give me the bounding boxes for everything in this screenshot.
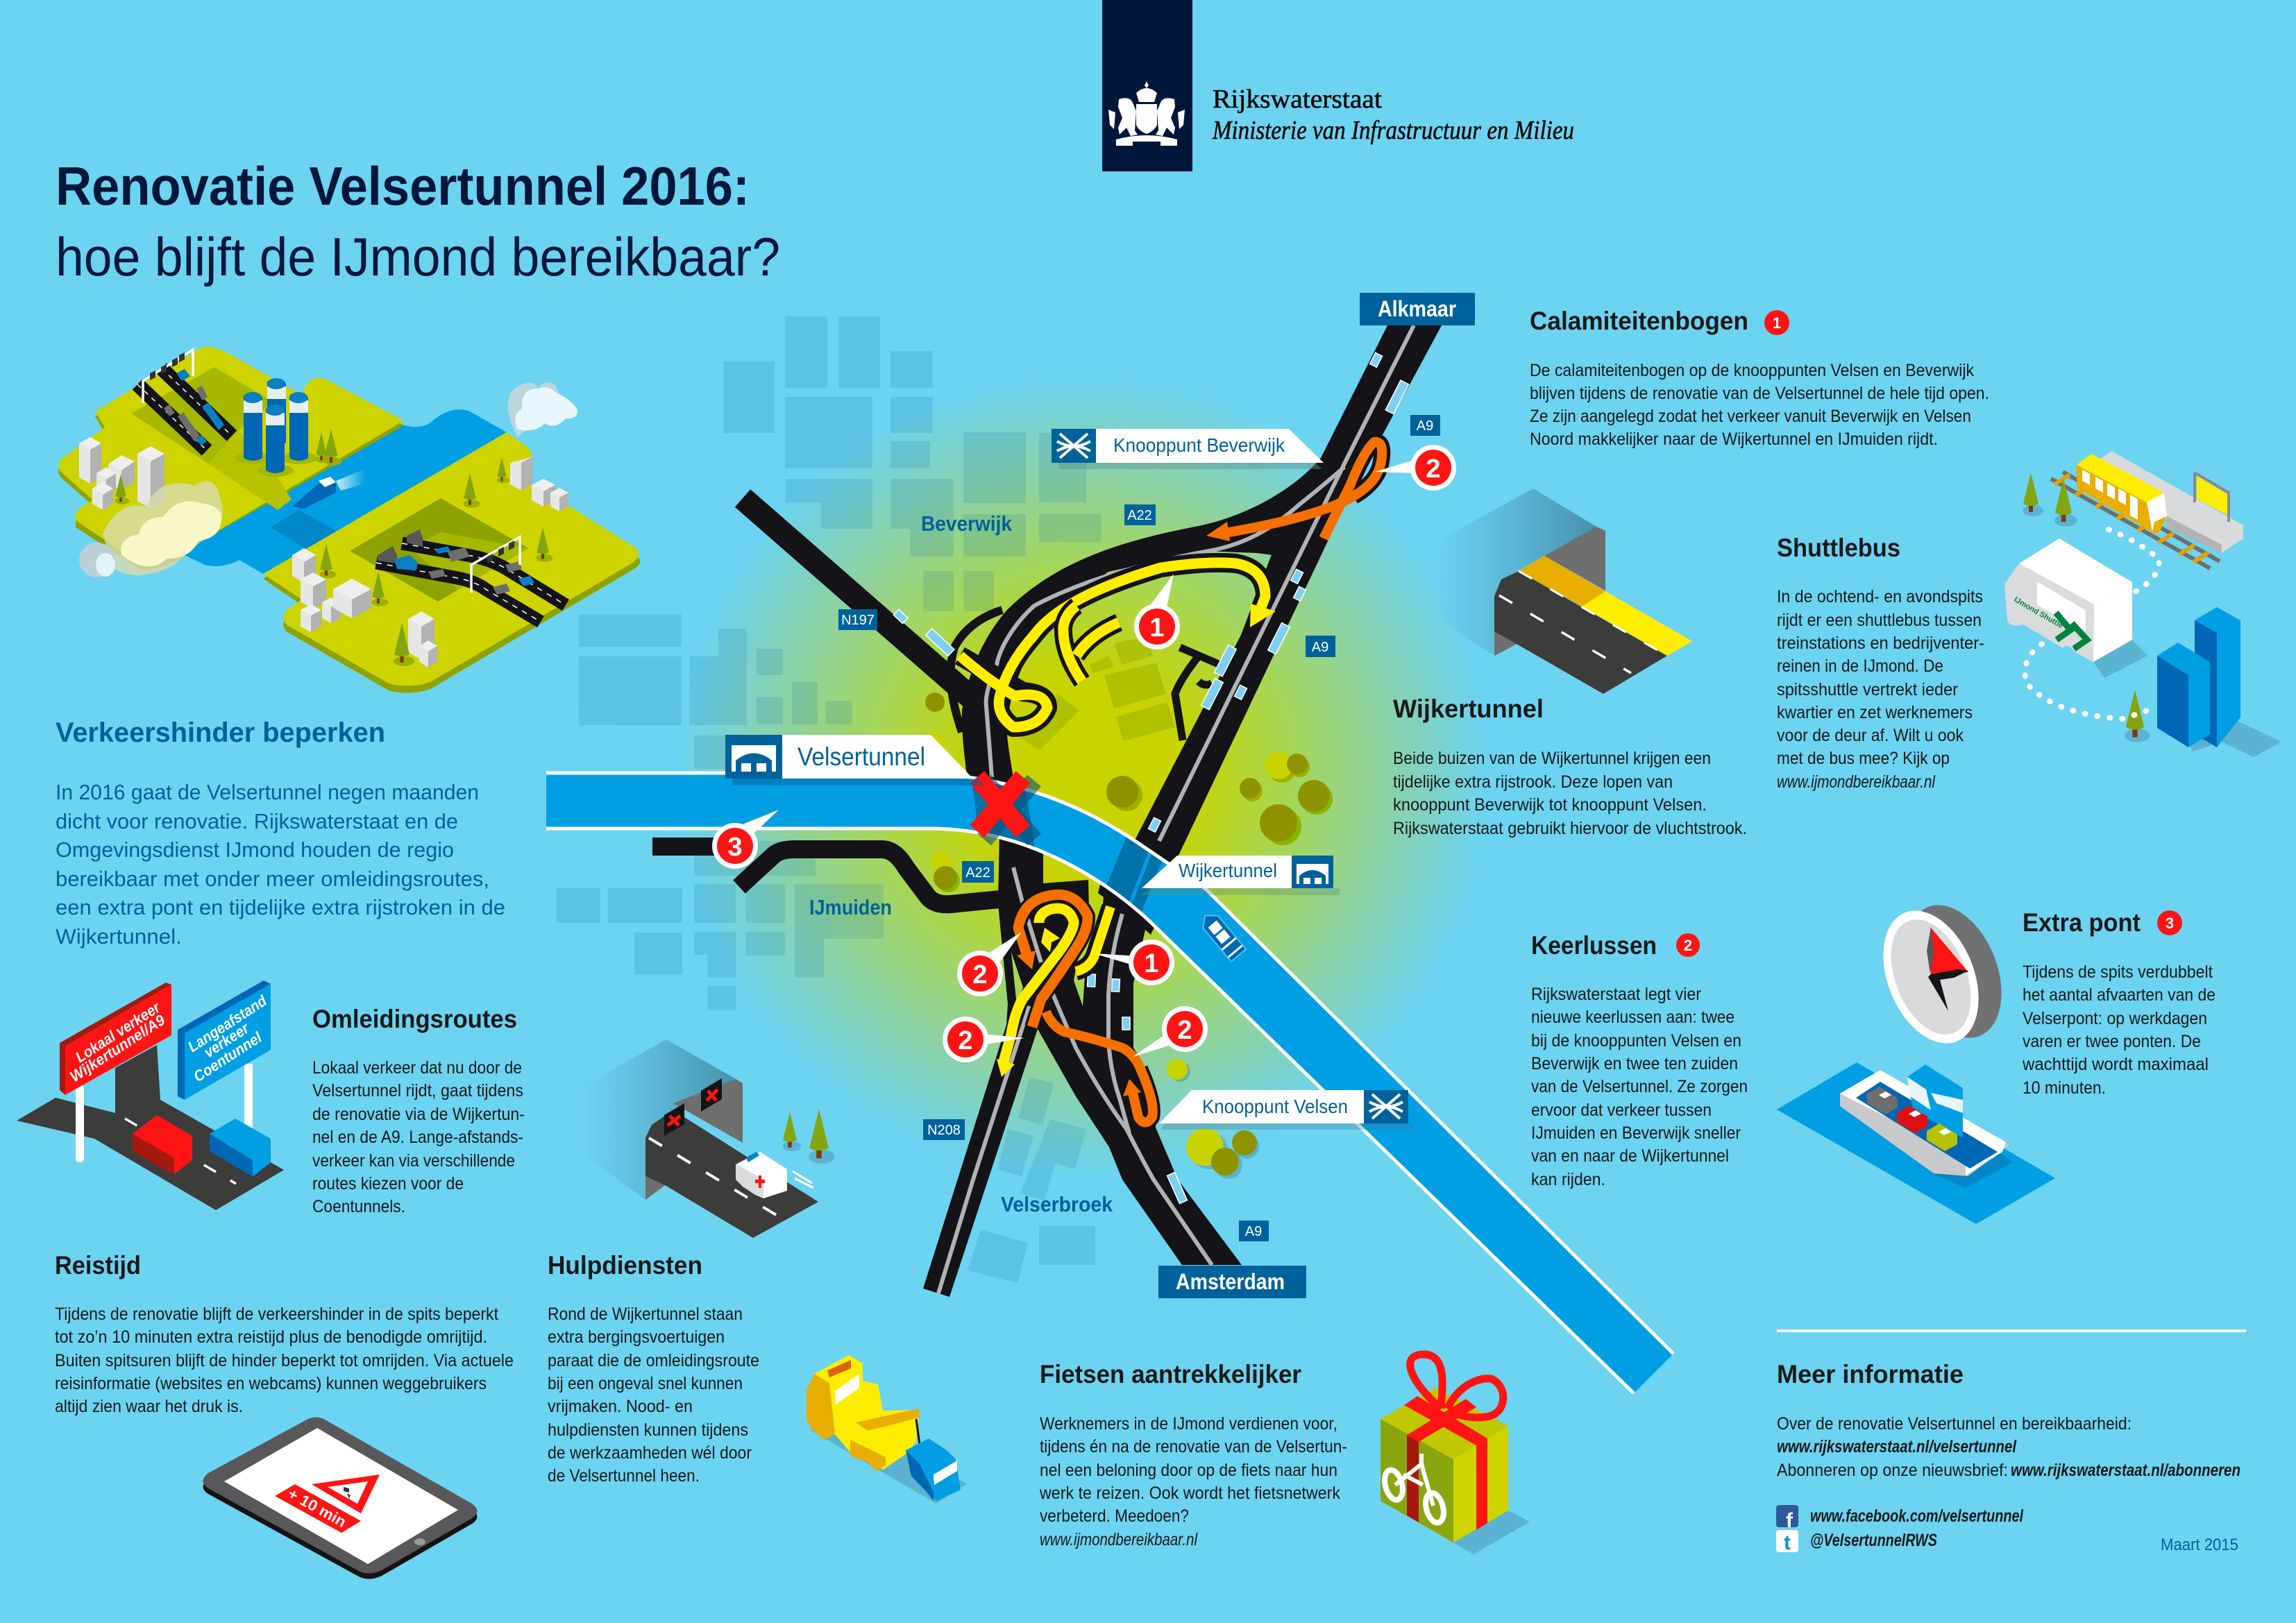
panel: Fietsen aantrekkelijker: verbeterd. Meedoen? — [1040, 1506, 1189, 1526]
panel: Meer informatie: www.rijkswaterstaat.nl/abonneren — [2011, 1461, 2240, 1480]
panel: Hulpdiensten: bij een ongeval snel kunnen — [548, 1374, 743, 1393]
tunnel portals — [378, 529, 423, 563]
illustration: isometric island with tunnels — [58, 347, 640, 693]
date: Maart 2015 — [2161, 1536, 2238, 1554]
label: Velsertunnel: Velsertunnel — [797, 742, 925, 771]
label: Velsertunnel — [725, 735, 984, 785]
panel: Hulpdiensten — [548, 1251, 759, 1486]
panel: Omleidingsroutes: Omleidingsroutes — [312, 1005, 517, 1033]
panel: Fietsen aantrekkelijker: nel een beloning door op de fiets naar hun — [1040, 1461, 1337, 1480]
label: Amsterdam — [1158, 1266, 1306, 1298]
red truck — [133, 1115, 192, 1174]
panel: Fietsen aantrekkelijker: Werknemers in de IJmond verdienen voor, — [1040, 1414, 1337, 1434]
panel: Shuttlebus: spitsshuttle vertrekt ieder — [1777, 680, 1958, 699]
panel: Shuttlebus: In de ochtend- en avondspits — [1777, 587, 1983, 606]
panel: Meer informatie: Abonneren op onze nieuwsbrief: — [1777, 1461, 2008, 1480]
panel: Hulpdiensten: hulpdiensten kunnen tijdens — [548, 1420, 748, 1440]
road: small ramp at A9 — [1175, 647, 1220, 740]
river section — [180, 409, 507, 574]
panel: Calamiteitenbogen: blijven tijdens de renovatie van de Velsertunnel de hele tijd open. — [1530, 384, 1989, 403]
panel: Meer informatie: www.rijkswaterstaat.nl/velsertunnel — [1777, 1437, 2017, 1456]
road: green gap in interchange — [1011, 952, 1023, 1006]
place names: Velserbroek — [1001, 1192, 1113, 1216]
panel: Fietsen aantrekkelijker: www.ijmondbereikbaar.nl — [1040, 1530, 1198, 1549]
road tag labels: A9 — [1312, 640, 1328, 655]
ship on map — [1198, 909, 1246, 962]
illustration: tow truck and car — [807, 1355, 967, 1504]
warning signals — [664, 1078, 722, 1136]
icon: twitter — [1776, 1530, 1798, 1554]
panel: Fietsen aantrekkelijker: Fietsen aantrekkelijker — [1040, 1360, 1301, 1388]
red sign: Wijkertunnel/A9 — [67, 1011, 169, 1085]
panel: Reistijd: Reistijd — [55, 1251, 141, 1280]
ambulance — [736, 1152, 813, 1198]
callout: 3 pont: 3 — [727, 833, 743, 862]
panel: Keerlussen: IJmuiden en Beverwijk sneller — [1531, 1123, 1741, 1143]
intro paragraph — [56, 780, 505, 949]
panel: Shuttlebus: kwartier en zet werknemers — [1777, 703, 1973, 722]
panel: Keerlussen: Keerlussen — [1531, 931, 1657, 960]
road: south interchange, A9 and N208 — [923, 833, 1242, 1297]
intro paragraph: Wijkertunnel. — [56, 924, 182, 949]
road: N197 — [743, 498, 979, 704]
marker: red cross Velsertunnel — [977, 777, 1034, 840]
panel: Omleidingsroutes: routes kiezen voor de — [312, 1174, 464, 1193]
panel: Extra pont: het aantal afvaarten van de — [2023, 985, 2215, 1005]
label: Alkmaar: Alkmaar — [1378, 296, 1456, 321]
blue truck — [210, 1119, 271, 1177]
shuttle bus: IJmond Shuttle — [2013, 595, 2064, 630]
illustration: tunnel with ambulance — [584, 1039, 834, 1238]
callout: 1 north — [1134, 574, 1180, 649]
panel: Calamiteitenbogen — [1530, 307, 1989, 449]
route 2: keerlus zuid geel — [997, 908, 1074, 1077]
badge 3: 3 — [2166, 915, 2174, 932]
subtitle: hoe blijft de IJmond bereikbaar? — [56, 226, 780, 287]
callout: 1 north: 1 — [1149, 613, 1165, 643]
cloud large — [79, 481, 223, 577]
intro paragraph: Omgevingsdienst IJmond houden de regio — [56, 838, 454, 862]
panel: Omleidingsroutes: Velsertunnel rijdt, gaat tijdens — [312, 1081, 523, 1101]
panel: Wijkertunnel: knooppunt Beverwijk tot knooppunt Velsen. — [1393, 795, 1707, 815]
shuttle bus — [2004, 538, 2147, 678]
blue sign: Langeafstand — [185, 992, 270, 1055]
panel: Wijkertunnel: Rijkswaterstaat gebruikt hiervoor de vluchtstrook. — [1393, 819, 1747, 838]
label: Alkmaar — [1360, 293, 1475, 325]
illustration: shuttlebus with train and offices — [2004, 451, 2281, 757]
callout: 2 zuid west: 2 — [972, 960, 988, 989]
place names: IJmuiden — [809, 895, 892, 919]
panel: Hulpdiensten: de Velsertunnel heen. — [548, 1466, 700, 1486]
crest — [1108, 81, 1185, 146]
panel: Meer informatie: Over de renovatie Velsertunnel en bereikbaarheid: — [1777, 1414, 2132, 1434]
left island — [58, 347, 404, 570]
panel: Omleidingsroutes: nel en de A9. Lange-afstands- — [312, 1128, 523, 1147]
callout: 2 zuid geel — [943, 1017, 1024, 1062]
panel: Extra pont: wachttijd wordt maximaal — [2022, 1055, 2209, 1074]
panel: Reistijd: reisinformatie (websites en webcams) kunnen weggebruikers — [55, 1374, 487, 1393]
panel: Omleidingsroutes: verkeer kan via verschillende — [312, 1151, 515, 1171]
badge 2: 2 — [1684, 937, 1692, 954]
gantries — [143, 350, 520, 593]
panel: Extra pont: 10 minuten. — [2023, 1078, 2106, 1098]
route 2: keerlus Beverwijk — [1206, 442, 1382, 541]
label: Wijkertunnel: Wijkertunnel — [1179, 860, 1277, 881]
label: Amsterdam: Amsterdam — [1176, 1269, 1285, 1294]
red sign: Lokaal verkeer — [72, 998, 164, 1066]
trees — [115, 429, 552, 666]
panel: Shuttlebus: treinstations en bedrijventer- — [1777, 634, 1984, 653]
trees — [2023, 473, 2150, 742]
right island — [263, 438, 640, 693]
cloud small — [508, 382, 577, 437]
label: Knooppunt Beverwijk — [1052, 429, 1324, 469]
trees on map — [920, 692, 1333, 1179]
text: Verkeershinder beperken: Verkeershinder beperken — [56, 717, 385, 748]
panel: Shuttlebus: rijdt er een shuttlebus tussen — [1777, 611, 1982, 630]
panel: Meer informatie — [1776, 1329, 2246, 1554]
billboard — [2195, 473, 2229, 522]
panel: Hulpdiensten: de werkzaamheden wél door — [548, 1443, 752, 1463]
illustration: tablet: + 10 min — [285, 1485, 349, 1531]
panel: Hulpdiensten: paraat die de omleidingsroute — [548, 1351, 759, 1370]
panel: Keerlussen — [1531, 931, 1748, 1189]
panel: Hulpdiensten: Rond de Wijkertunnel staan — [548, 1305, 743, 1324]
icon: twitter: t — [1784, 1531, 1791, 1554]
panel: Keerlussen: van de Velsertunnel. Ze zorgen — [1531, 1077, 1748, 1096]
icon: facebook: f — [1786, 1509, 1793, 1532]
panel: Extra pont: Velserpont: op werkdagen — [2023, 1009, 2207, 1028]
intro paragraph: In 2016 gaat de Velsertunnel negen maanden — [56, 780, 479, 804]
route 1: zuid — [1076, 907, 1111, 971]
panel: Omleidingsroutes: Lokaal verkeer dat nu door de — [312, 1058, 522, 1078]
panel: Reistijd — [55, 1251, 514, 1416]
logo ministry line: Ministerie van Infrastructuur en Milieu — [1212, 116, 1574, 145]
callout: 2 Beverwijk: 2 — [1426, 454, 1441, 484]
panel: Reistijd: Buiten spitsuren blijft de hinder beperkt tot omrijden. Via actuele — [55, 1351, 514, 1370]
panel: Reistijd: altijd zien waar het druk is. — [55, 1397, 243, 1416]
sunken road areas — [131, 367, 273, 464]
panel: Reistijd: tot zo’n 10 minuten extra reistijd plus de benodigde omrijtijd. — [55, 1327, 487, 1347]
panel: Wijkertunnel: tijdelijke extra rijstrook. Deze lopen van — [1393, 772, 1673, 792]
panel: Extra pont: Tijdens de spits verdubbelt — [2023, 962, 2213, 982]
towers — [235, 452, 271, 464]
road tag labels — [841, 418, 1433, 1239]
roads — [652, 325, 1442, 1297]
panel: Keerlussen: nieuwe keerlussen aan: twee — [1531, 1008, 1734, 1027]
panel: Keerlussen: bij de knooppunten Velsen en — [1531, 1031, 1741, 1051]
intro paragraph: bereikbaar met onder meer omleidingsroutes, — [56, 867, 489, 891]
panel: Wijkertunnel: Beide buizen van de Wijkertunnel krijgen een — [1393, 749, 1711, 768]
intro paragraph: dicht voor renovatie. Rijkswaterstaat en de — [56, 809, 458, 833]
panel: Calamiteitenbogen: Calamiteitenbogen — [1530, 307, 1748, 335]
route dots — [2025, 529, 2159, 719]
panel: Shuttlebus: met de bus mee? Kijk op — [1777, 749, 1950, 768]
panel: Keerlussen: kan rijden. — [1531, 1170, 1605, 1189]
panel: Keerlussen: ervoor dat verkeer tussen — [1531, 1101, 1712, 1120]
route 2: keerlus zuid oranje — [1017, 894, 1088, 1027]
callout: 2 zuid geel: 2 — [958, 1026, 973, 1055]
title: Renovatie Velsertunnel 2016: — [56, 155, 750, 216]
text: Verkeershinder beperken — [56, 717, 505, 949]
blue sign — [178, 980, 271, 1100]
callout: 1 zuid — [1094, 940, 1174, 985]
road tag labels: A9 — [1417, 418, 1433, 434]
road tag labels: A22 — [965, 865, 990, 881]
illustration: clock — [1865, 891, 2020, 1057]
illustration: gift — [1381, 1354, 1530, 1554]
road tag labels: N197 — [841, 613, 875, 628]
poles — [76, 1064, 253, 1162]
label: Knooppunt Velsen — [1159, 1090, 1414, 1130]
panel: Omleidingsroutes — [312, 1005, 525, 1216]
road: A22 north — [962, 458, 1336, 788]
offices — [2157, 607, 2281, 757]
road — [17, 1045, 284, 1210]
place names — [809, 511, 1113, 1216]
glow — [677, 375, 1489, 1180]
intro paragraph: een extra pont en tijdelijke extra rijstroken in de — [56, 895, 505, 919]
tracks — [2051, 472, 2220, 568]
routes — [960, 442, 1382, 1123]
badge 1: 1 — [1773, 314, 1781, 332]
road tag labels: A22 — [1127, 508, 1152, 523]
panel: Calamiteitenbogen: De calamiteitenbogen op de knooppunten Velsen en Beverwijk — [1530, 361, 1974, 380]
road tag labels: N208 — [927, 1123, 961, 1138]
title — [56, 155, 780, 287]
blue sign: Coentunnel — [190, 1028, 265, 1085]
place names: Beverwijk — [921, 511, 1013, 536]
panel: Fietsen aantrekkelijker — [1039, 1360, 1347, 1549]
illustration: tablet — [203, 1417, 478, 1579]
badge 3 — [2157, 910, 2182, 935]
badge 2 — [1676, 933, 1700, 957]
illustration: Wijkertunnel — [1435, 488, 1692, 694]
road: thin loop west — [951, 610, 1002, 732]
panel: Shuttlebus: reinen in de IJmond. De — [1777, 656, 1943, 676]
callout: 3 pont — [712, 810, 779, 869]
road tag labels: A9 — [1245, 1224, 1262, 1239]
panel: Omleidingsroutes: de renovatie via de Wijkertun- — [312, 1105, 525, 1124]
route 2: keerlus lower — [1046, 1012, 1153, 1123]
panel: Wijkertunnel: Wijkertunnel — [1393, 695, 1544, 723]
river — [546, 763, 1673, 1393]
label: Knooppunt Beverwijk: Knooppunt Beverwijk — [1113, 434, 1285, 456]
road: A9 north — [1128, 325, 1442, 874]
panel: Hulpdiensten: extra bergingsvoertuigen — [548, 1327, 725, 1347]
panel: Fietsen aantrekkelijker: werk te reizen. Ook wordt het fietsnetwerk — [1039, 1484, 1340, 1503]
route 1: calamiteitenboog noord — [960, 563, 1276, 727]
vehicles — [164, 386, 522, 595]
callout: 2 Beverwijk — [1375, 445, 1456, 491]
callout: 2 zuid west — [957, 932, 1022, 996]
city blocks — [557, 316, 1101, 1283]
roads — [137, 368, 232, 450]
label: Wijkertunnel — [1142, 856, 1340, 895]
panel: Shuttlebus — [1777, 534, 1984, 792]
panel: Fietsen aantrekkelijker: tijdens én na de renovatie van de Velsertun- — [1040, 1437, 1347, 1456]
panel: Omleidingsroutes: Coentunnels. — [312, 1197, 405, 1216]
map — [546, 293, 1673, 1393]
train — [2076, 454, 2167, 534]
red sign — [60, 983, 171, 1095]
panel: Wijkertunnel — [1393, 695, 1747, 838]
illustration: route signs — [17, 980, 284, 1210]
badge 1 — [1764, 310, 1789, 335]
ship — [292, 469, 365, 509]
blue sign: verkeer — [201, 1019, 253, 1061]
panel: Shuttlebus: www.ijmondbereikbaar.nl — [1777, 772, 1936, 792]
trees — [782, 1109, 834, 1164]
illustration: ferry — [1777, 1062, 2055, 1224]
panel: Meer informatie: @VelsertunnelRWS — [1810, 1531, 1937, 1550]
road: west to IJmuiden — [652, 847, 1006, 904]
label: Knooppunt Velsen: Knooppunt Velsen — [1202, 1096, 1348, 1117]
callout: 2 zuid oost: 2 — [1177, 1016, 1192, 1045]
panel: Hulpdiensten: vrijmaken. Nood- en — [548, 1397, 693, 1416]
panel: Reistijd: Tijdens de renovatie blijft de verkeershinder in de spits beperkt — [55, 1305, 498, 1324]
panel: Keerlussen: Rijkswaterstaat legt vier — [1531, 985, 1701, 1004]
buildings — [79, 437, 568, 668]
panel: Shuttlebus: voor de deur af. Wilt u ook — [1777, 726, 1964, 745]
panel: Keerlussen: Beverwijk en twee ten zuiden — [1531, 1054, 1738, 1073]
panel: Keerlussen: van en naar de Wijkertunnel — [1531, 1146, 1729, 1166]
icon: facebook — [1776, 1505, 1798, 1532]
panel: Shuttlebus: Shuttlebus — [1777, 534, 1900, 562]
panel: Extra pont: Extra pont — [2023, 908, 2141, 937]
logo: Rijkswaterstaat — [1102, 0, 1574, 171]
olive blocks in the centre — [1013, 637, 1175, 751]
panel: Calamiteitenbogen: Ze zijn aangelegd zodat het verkeer vanuit Beverwijk en Velsen — [1530, 407, 1971, 426]
panel: Meer informatie: Meer informatie — [1777, 1360, 1964, 1388]
logo wordmark: Rijkswaterstaat — [1213, 85, 1382, 114]
panel: Extra pont: varen er twee ponten. De — [2023, 1032, 2201, 1051]
panel: Hulpdiensten: Hulpdiensten — [548, 1251, 702, 1280]
vehicles on roads — [893, 352, 1409, 1204]
tunnel under river — [972, 780, 1162, 912]
callout: 1 zuid: 1 — [1144, 949, 1159, 978]
panel: Calamiteitenbogen: Noord makkelijker naar de Wijkertunnel en IJmuiden rijdt. — [1530, 430, 1938, 449]
callout: 2 zuid oost — [1133, 1006, 1208, 1057]
panel: Meer informatie: www.facebook.com/velsertunnel — [1810, 1506, 2024, 1526]
platform — [2096, 451, 2243, 553]
road centre lines — [938, 325, 1414, 1293]
panel: Extra pont — [2022, 908, 2215, 1098]
road tags — [838, 415, 1440, 1241]
